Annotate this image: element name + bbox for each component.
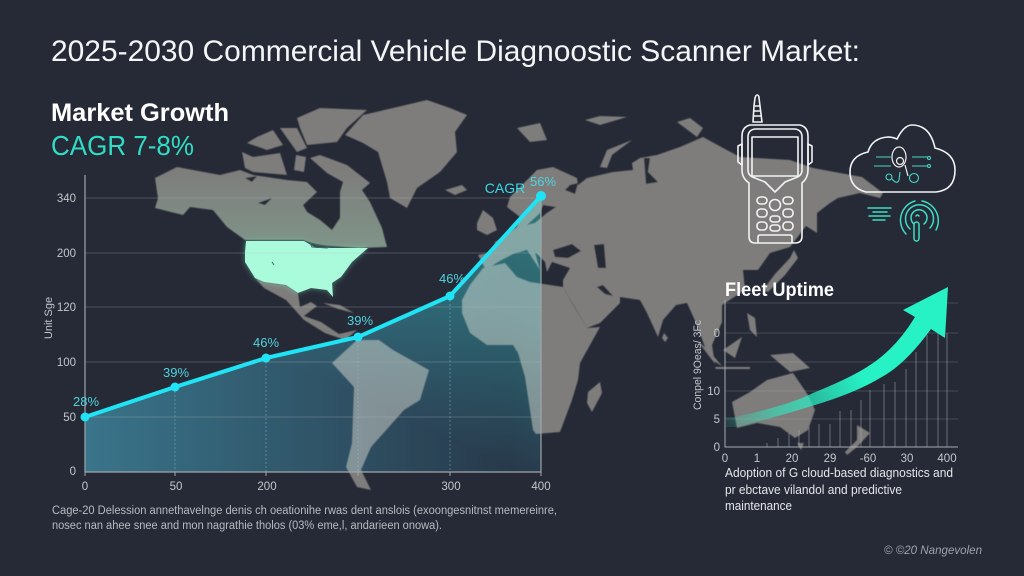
land: New Guinea [770,353,810,372]
inland water [245,158,658,296]
description text [725,465,953,513]
y axis labels: 50 [63,412,76,424]
footnote text: Cage-20 Delession annethavelnge denis ch oeationihe rwas dent anslois (exoongesnitnst memereinre, [52,505,557,517]
x axis labels [82,481,551,493]
percentage labels: 28% [73,394,99,409]
arrow: uptime growth [726,287,948,427]
vertical bars [767,333,947,447]
y axis labels: 340 [57,193,76,205]
x axis labels: 300 [441,481,461,493]
description text: pr ebctave vilandol and predictive [725,482,902,497]
land: Central America [255,278,357,340]
land: Japan [763,250,798,292]
y axis labels: 0 [70,466,76,478]
title: 2025-2030 Commercial Vehicle Diagnoostic Scanner Market: [51,35,860,68]
heading: market growth: Market Growth [51,99,229,127]
land: South America [332,340,429,490]
fleet x axis labels: 30 [901,453,913,465]
percentage labels: 46% [439,271,465,286]
percentage labels: CAGR [485,180,525,196]
fleet y axis labels: 5 [714,414,720,426]
world map [155,100,883,490]
growth line [80,191,546,422]
fleet x axis labels [722,453,957,465]
icon: handheld diagnostic scanner [738,95,812,243]
fleet x axis labels: 1 [754,453,760,465]
land: Cuba [323,303,354,313]
fleet x axis labels: 29 [824,453,836,465]
fleet x axis labels: -60 [860,453,876,465]
percentage labels: 39% [347,313,373,328]
x axis labels: 50 [170,481,182,493]
land: Australia [732,373,815,438]
y axis labels: 200 [57,248,76,260]
fleet y axis title: Conpel 9Oeas/ 3Fc [692,320,704,410]
percentage labels [73,174,556,409]
chart area fill [85,196,541,472]
description text: maintenance [725,498,792,513]
land: North America [155,155,387,248]
land: Greenland [345,100,467,208]
x axis labels: 0 [82,481,88,493]
icon: cloud diagnostics [850,125,955,192]
land: New Zealand [845,425,870,455]
percentage labels: 39% [163,365,189,380]
y axis labels: 100 [57,357,76,369]
footnote text [52,505,557,532]
land: Arctic archipelago [242,108,367,175]
fleet y axis labels: 10 [707,386,720,398]
land: Sri Lanka and Tasmania [662,333,804,450]
land: Indonesia and Philippines [697,313,757,369]
land: Africa [462,263,600,434]
heading: fleet uptime: Fleet Uptime [725,280,834,301]
land: Arctic islands [517,116,703,168]
fleet y axis labels: 0 [714,442,720,454]
y axis labels: 120 [57,302,76,314]
copyright: © ©20 Nangevolen [884,543,982,557]
footnote text: nosec nan ahee snee and mon nagrathie tholos (03% eme,l, andarieen onowa). [52,520,442,532]
chart: fleet uptime [692,287,958,465]
description text: Adoption of G cloud-based diagnostics and [725,465,953,480]
fleet x axis labels: 400 [937,453,957,465]
icon: wireless signal [868,201,938,241]
land: Iceland [445,185,467,195]
fleet x axis labels: 0 [722,453,728,465]
highlighted United States [245,241,368,297]
x axis labels: 200 [257,481,277,493]
fleet y axis labels: 0 [714,328,720,340]
line chart: market growth [43,174,556,493]
fleet x axis labels: 20 [786,453,798,465]
y axis labels [57,193,76,478]
x axis labels: 400 [531,481,551,493]
y axis title: Unit Sge [43,297,55,339]
land: United Kingdom [477,210,497,235]
percentage labels: 46% [253,335,279,350]
land: Madagascar [587,382,602,412]
fleet y axis labels [707,328,720,454]
percentage labels: 56% [530,174,556,189]
land: Eurasia [478,137,883,364]
heading: CAGR: CAGR 7-8% [51,130,194,161]
